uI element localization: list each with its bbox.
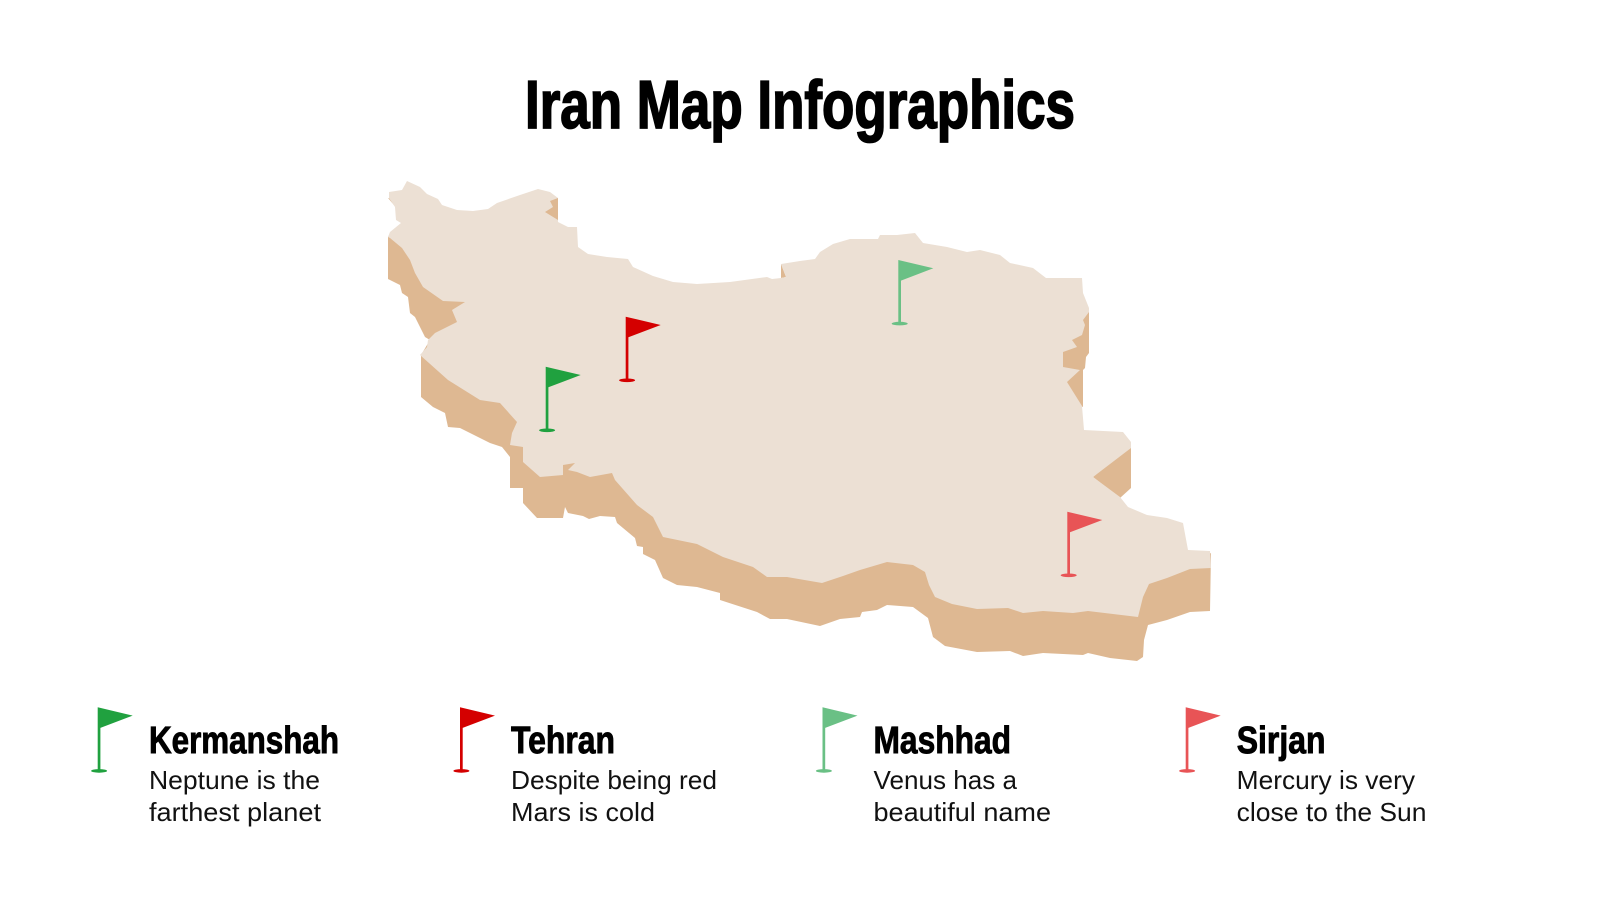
- title: Iran Map Infographics: [525, 67, 1075, 143]
- icon: green flag: [91, 707, 133, 773]
- map: top face: [388, 181, 1211, 617]
- map: extruded side: [388, 195, 1211, 661]
- legend: Kermanshah: [91, 707, 339, 827]
- heading: Sirjan: [1237, 720, 1326, 762]
- legend: Sirjan: [1179, 707, 1426, 827]
- icon: light green flag: [816, 707, 858, 773]
- map of Iran: [388, 181, 1211, 661]
- description: Venus has a: [874, 765, 1018, 795]
- heading: Mashhad: [874, 720, 1011, 762]
- description: farthest planet: [149, 797, 322, 827]
- heading: Tehran: [511, 720, 615, 762]
- heading: Kermanshah: [149, 720, 339, 762]
- legend: Tehran: [453, 707, 717, 827]
- icon: light red flag: [1179, 707, 1221, 773]
- description: close to the Sun: [1237, 797, 1426, 827]
- map flag: Tehran: [619, 317, 661, 382]
- description: Neptune is the: [149, 765, 320, 795]
- description: Mercury is very: [1237, 765, 1415, 795]
- description: Despite being red: [511, 765, 717, 795]
- map flag: Sirjan: [1061, 512, 1102, 577]
- legend: Mashhad: [816, 707, 1051, 827]
- description: Mars is cold: [511, 797, 655, 827]
- map flag: Mashhad: [892, 260, 933, 325]
- description: beautiful name: [874, 797, 1051, 827]
- map flag: Kermanshah: [539, 367, 581, 432]
- icon: red flag: [453, 707, 495, 773]
